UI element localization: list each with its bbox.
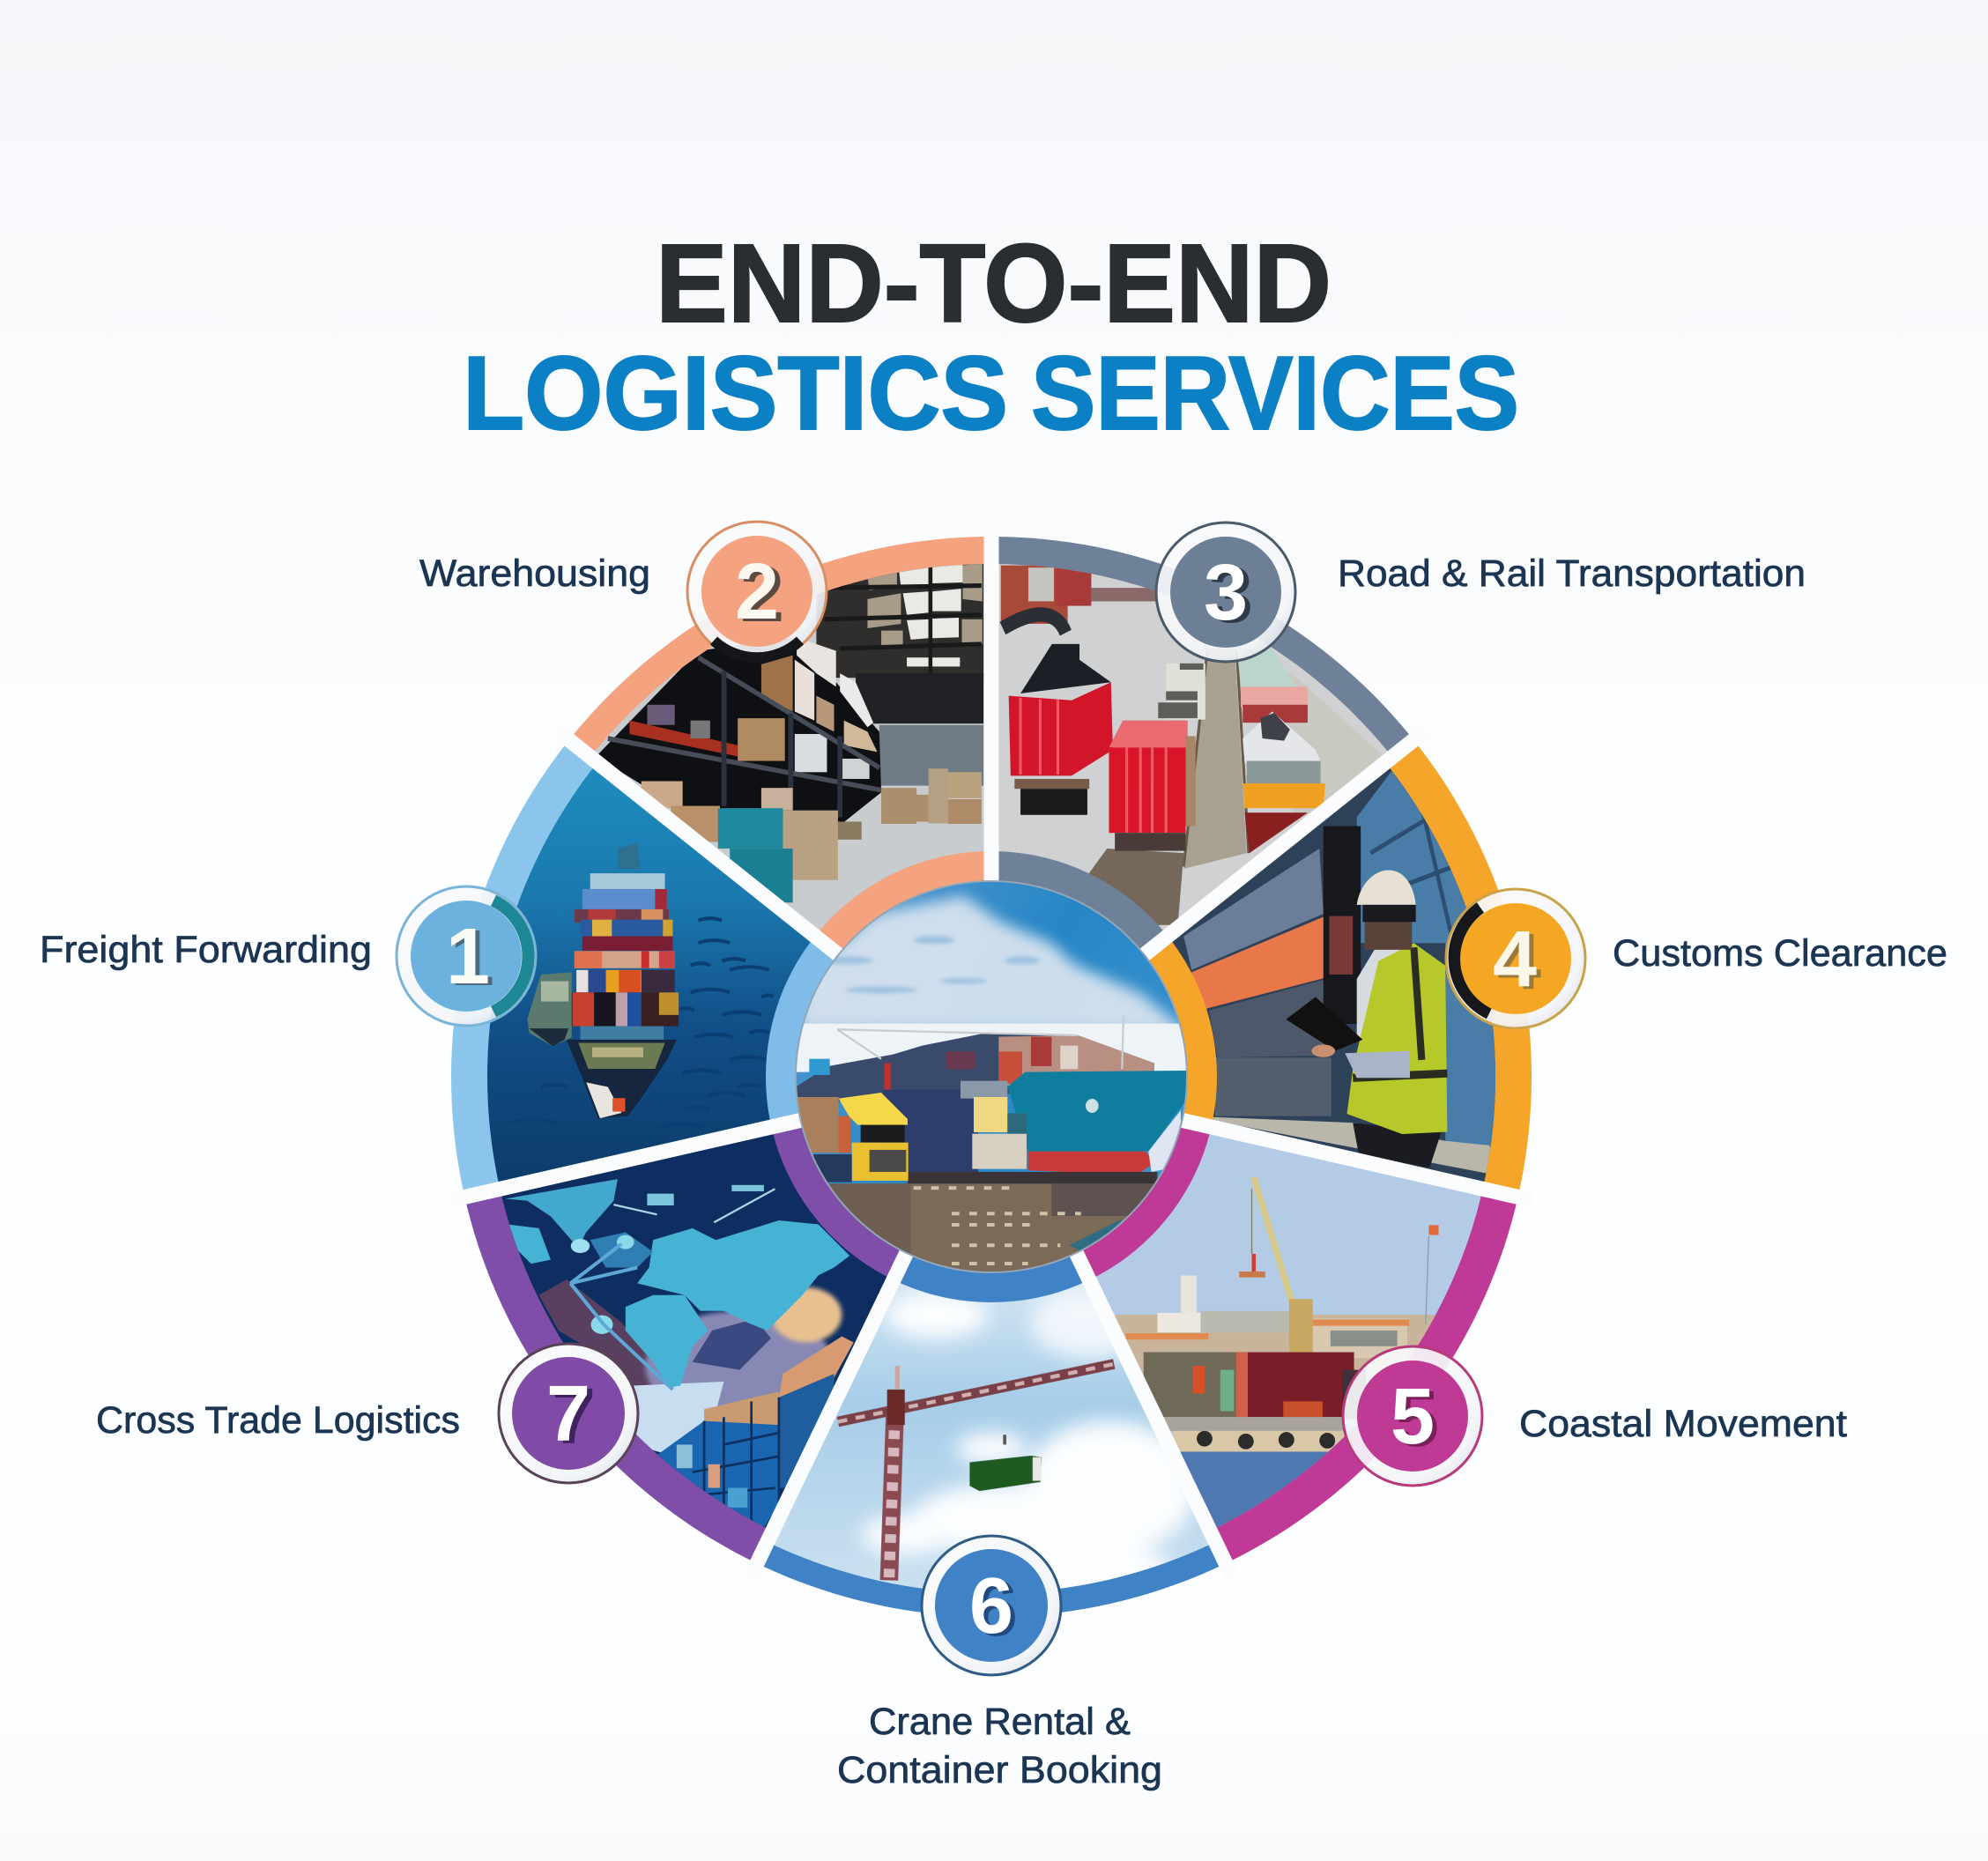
warehouse racks [596,637,881,902]
map glow and clouds [539,1279,842,1452]
red container one [1009,682,1113,815]
badge 5: 5 [1391,1373,1435,1461]
badge 6: 6 [974,1565,1018,1653]
second truck [961,1081,1027,1169]
badge 2: 2 [735,548,779,636]
badge 1: 1 [446,913,490,1001]
badge 7 [499,1344,638,1483]
label: freight forwarding: Freight Forwarding [40,929,372,971]
ship and containers [796,1016,1190,1175]
badge 3 [1156,523,1295,662]
locomotive [1242,711,1325,853]
title line 2 part 1: LOGISTICS [463,335,1008,452]
panel: freight forwarding segment [451,745,834,1190]
title [463,221,1519,452]
port crane [1239,1177,1313,1370]
tower crane [838,1364,1114,1580]
badge 1 [397,886,536,1026]
title line 2 part 2: SERVICES [1031,335,1519,452]
container ship [567,843,679,1118]
badge 1: 1 [450,915,494,1003]
badge 7: 7 [552,1373,596,1461]
badge 2 [687,522,827,661]
world map [506,1179,849,1388]
label: warehousing: Warehousing [419,552,650,595]
centre photo: container ship at port [793,879,1192,1280]
badge 4 [1446,889,1585,1028]
panel: road and rail segment [999,537,1409,948]
label: coastal movement: Coastal Movement [1519,1403,1847,1445]
service wheel [399,522,1547,1617]
badge 4: 4 [1493,916,1537,1004]
badge 7: 7 [546,1370,590,1458]
label: road and rail transportation: Road & Rail Transportation [1338,552,1806,595]
panel: cross trade segment [466,1128,900,1560]
label: cross trade logistics: Cross Trade Logistics [96,1399,460,1442]
tug boat [527,972,572,1047]
panel: customs clearance segment [1149,745,1532,1190]
panel: coastal movement segment [1083,1128,1517,1560]
lifted green container [969,1435,1042,1491]
label: customs clearance: Customs Clearance [1613,932,1947,975]
badge 2: 2 [740,551,784,639]
badge 6: 6 [969,1562,1013,1650]
badge 6 [922,1536,1061,1675]
badge 3: 3 [1209,552,1253,640]
badge 4: 4 [1497,918,1541,1006]
ground [828,1172,1158,1272]
panel: crane rental segment [763,1257,1220,1613]
worker with hi-vis vest [1286,870,1447,1168]
label: crane rental and container booking: Crane Rental & [869,1701,1131,1743]
container crane claw [1003,614,1111,693]
stacked containers [653,1337,854,1535]
badge 5 [1343,1346,1482,1486]
red container two [1109,721,1196,851]
label: crane rental and container booking [837,1701,1162,1791]
panel: warehousing segment [574,537,983,948]
title line 1: END-TO-END [656,221,1332,345]
label: crane rental and container booking: Container Booking [837,1749,1162,1791]
yellow truck [796,1093,909,1183]
badge 3: 3 [1204,549,1248,637]
badge 5: 5 [1395,1375,1439,1464]
